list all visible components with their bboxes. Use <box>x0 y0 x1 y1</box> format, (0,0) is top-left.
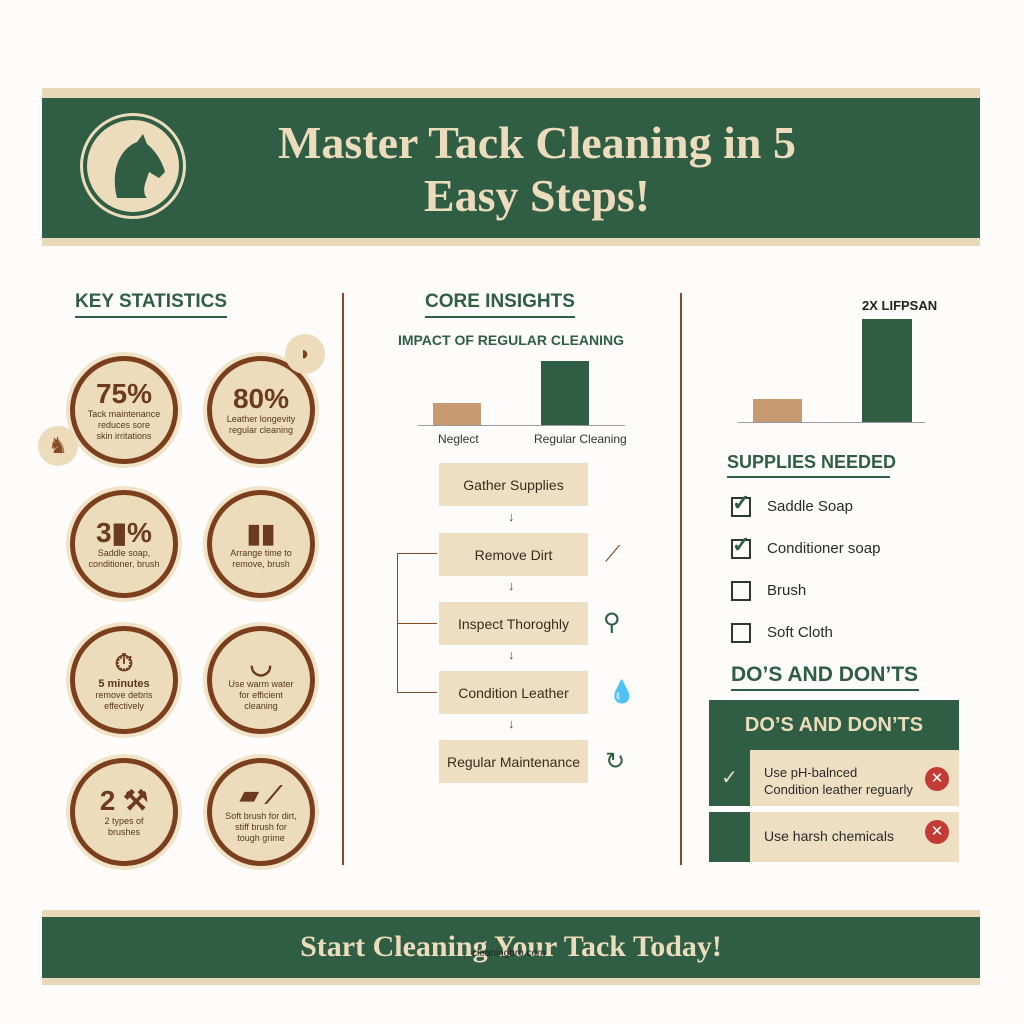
icon: magnifier: ⚲ <box>603 609 621 636</box>
flowchart: steps: ↓ <box>508 647 514 662</box>
stat brush types: ▰ ⟋ <box>240 782 282 808</box>
stat brush types: Soft brush for dirt, <box>225 810 297 820</box>
stat 80%: Leather longevity <box>227 414 295 424</box>
checklist: supplies: Brush <box>767 582 806 599</box>
stat 80%: regular cleaning <box>229 425 293 435</box>
footer text: Start Cleaning Your Tack Today! <box>300 930 722 963</box>
icon: brush: ⟋ <box>605 541 620 566</box>
stat supplies: remove, brush <box>232 559 290 569</box>
stat brush types: tough grime <box>237 832 285 842</box>
bar chart: impact: Regular Cleaning <box>534 432 627 446</box>
table: dos and donts: ✕ <box>931 770 943 787</box>
checklist: supplies: Conditioner soap <box>767 540 880 557</box>
table: dos and donts: ✓ <box>721 767 738 789</box>
flowchart: steps: ↓ <box>508 716 514 731</box>
icon: horse badge <box>38 426 78 466</box>
stat 75%: skin irritations <box>96 430 152 440</box>
stat 75% <box>70 356 178 464</box>
flowchart: steps: Condition Leather <box>458 684 569 700</box>
flowchart: steps <box>397 463 635 783</box>
stat warm water: for efficient <box>239 690 283 700</box>
heading: supplies needed: SUPPLIES NEEDED <box>727 452 896 472</box>
stat warm water: Use warm water <box>228 678 294 688</box>
stat 5 minutes <box>70 626 178 734</box>
stat 5 minutes: effectively <box>104 700 144 710</box>
panel: statistics circles <box>38 334 325 870</box>
stat 30%: conditioner, brush <box>88 559 160 569</box>
icon: saddle badge: ◗ <box>299 343 311 365</box>
bar chart: lifespan: 2X LIFPSAN <box>862 298 937 313</box>
stat supplies <box>207 490 315 598</box>
icon: horse badge: ♞ <box>48 433 68 458</box>
table: dos and donts: Use harsh chemicals <box>764 828 894 844</box>
checklist: supplies: Saddle Soap <box>767 498 853 515</box>
subheading: impact: IMPACT OF REGULAR CLEANING <box>398 332 624 348</box>
bar chart: impact: Neglect <box>438 432 479 446</box>
stat supplies: Arrange time to <box>230 548 292 558</box>
bar chart: impact <box>418 361 627 446</box>
title <box>278 117 796 221</box>
stat warm water: cleaning <box>244 700 278 710</box>
header banner <box>42 88 980 246</box>
stat 2 brushes: 2 types of <box>104 816 144 826</box>
flowchart: steps: Gather Supplies <box>463 476 564 492</box>
stat 75%: reduces sore <box>98 420 150 430</box>
flowchart: steps: Inspect Thoroghly <box>458 616 569 632</box>
icon: cycle: ↻ <box>605 748 625 775</box>
title: Master Tack Cleaning in 5 <box>278 117 796 168</box>
heading: key statistics: KEY STATISTICS <box>75 291 227 312</box>
title: Easy Steps! <box>424 170 650 221</box>
table: dos and donts: Use pH-balnced <box>764 765 857 780</box>
table: dos and donts: Condition leather reguarly <box>764 782 913 797</box>
stat 5 minutes: remove debris <box>95 690 153 700</box>
stat 75%: Tack maintenance <box>88 408 160 418</box>
stat 5 minutes: 5 minutes <box>98 678 150 690</box>
stat brush types: stiff brush for <box>235 822 287 832</box>
stat brush types <box>207 758 315 866</box>
icon: horse head logo <box>83 116 183 216</box>
heading: core insights: CORE INSIGHTS <box>425 291 575 312</box>
stat 30%: Saddle soap, <box>98 548 150 558</box>
checklist: supplies: Soft Cloth <box>767 624 833 641</box>
stat 30% <box>70 490 178 598</box>
bar chart: lifespan <box>738 298 937 423</box>
checklist: supplies <box>731 490 880 643</box>
stat warm water: ◡ <box>250 648 272 678</box>
flowchart: steps: Remove Dirt <box>475 546 552 562</box>
stat 2 brushes <box>70 758 178 866</box>
stat 30%: 3▮% <box>96 517 152 548</box>
icon: drop: 💧 <box>608 679 635 704</box>
stat 80% <box>207 356 315 464</box>
stat 5 minutes: ⏱ <box>115 650 133 676</box>
heading: dos and donts: DO’S AND DON’TS <box>731 663 918 686</box>
table: dos and donts: DO’S AND DON’TS <box>745 714 923 736</box>
stat 2 brushes: brushes <box>108 827 140 837</box>
stat 2 brushes: 2 ⚒ <box>100 785 148 816</box>
table: dos and donts: ✕ <box>931 823 943 840</box>
stat warm water <box>207 626 315 734</box>
stat supplies: ▮▮ <box>247 518 275 548</box>
icon: saddle badge <box>285 334 325 374</box>
stat 75%: 75% <box>96 378 152 408</box>
checklist: supplies: ✓ <box>732 490 750 515</box>
flowchart: steps: Regular Maintenance <box>447 754 580 770</box>
checklist: supplies: ✓ <box>732 532 750 557</box>
flowchart: steps: ↓ <box>508 509 514 524</box>
table: dos and donts <box>709 700 959 862</box>
footer banner: cleaningbro.com <box>472 948 545 959</box>
flowchart: steps: ↓ <box>508 578 514 593</box>
footer banner <box>42 910 980 985</box>
stat 80%: 80% <box>233 383 289 414</box>
